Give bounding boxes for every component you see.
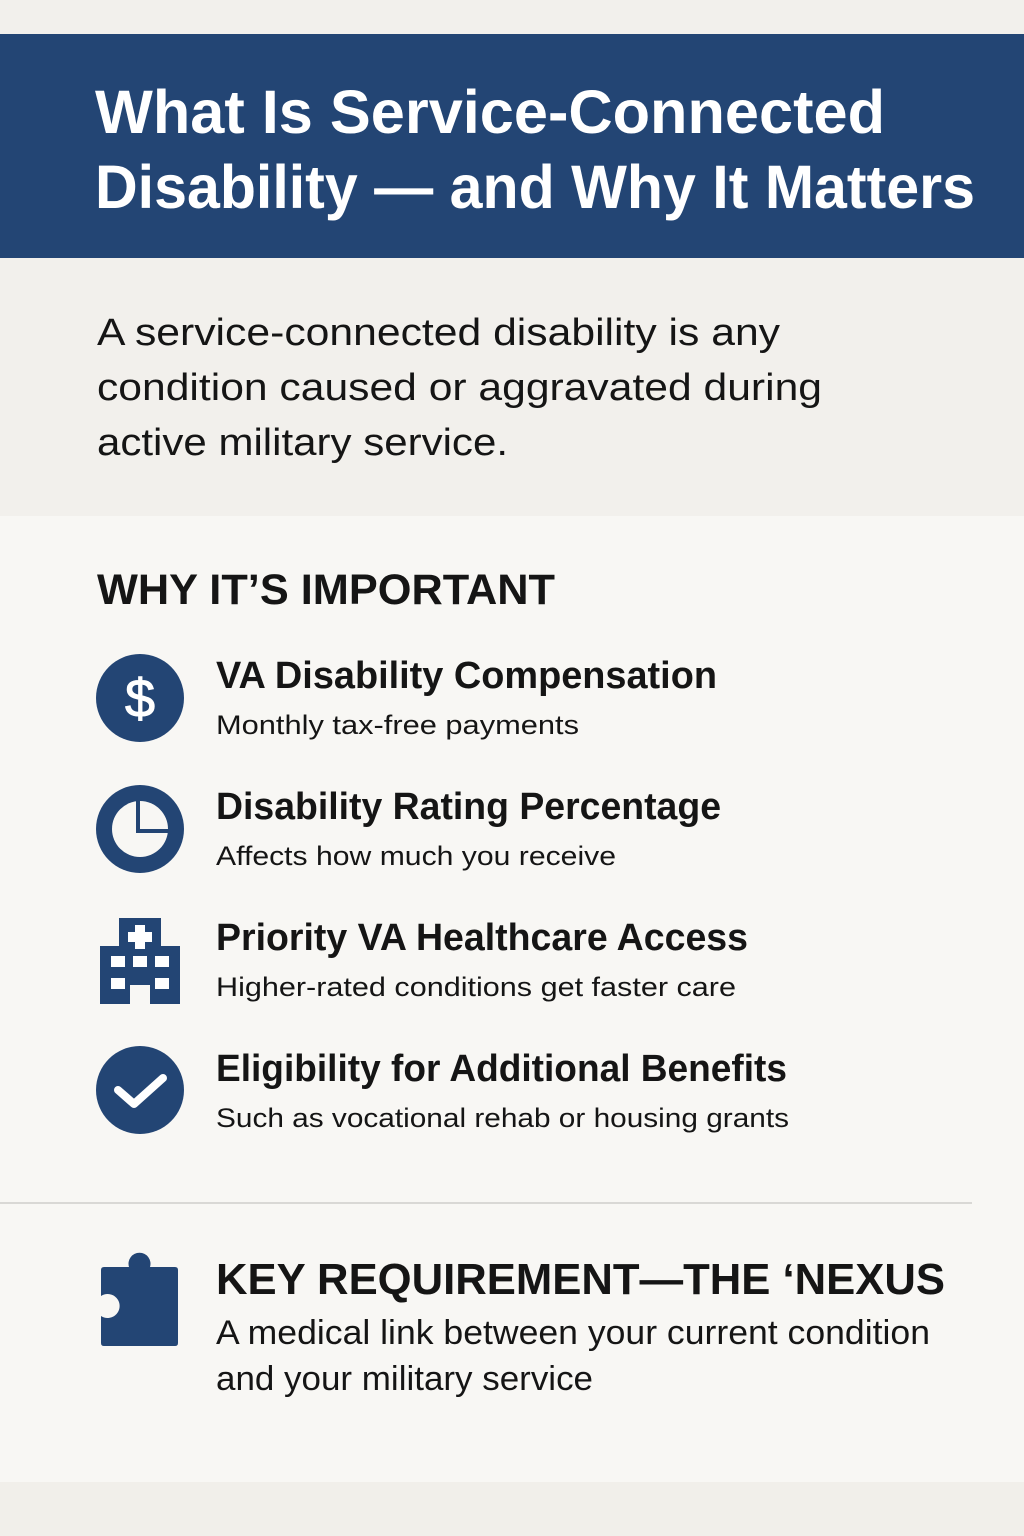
intro text: A service-connected disability is any	[97, 312, 780, 354]
icon: puzzle piece	[101, 1253, 178, 1346]
key requirement section: and your military service	[216, 1360, 593, 1398]
item: VA Disability Compensation	[96, 654, 717, 742]
item: VA Disability Compensation: VA Disability Compensation	[216, 655, 717, 697]
icon: pie chart	[96, 785, 184, 873]
item: Disability Rating Percentage: Disability Rating Percentage	[216, 786, 721, 828]
item: Priority VA Healthcare Access: Higher-rated conditions get faster care	[216, 972, 736, 1002]
title: What Is Service-Connected	[95, 78, 885, 146]
key requirement section: A medical link between your current condition	[216, 1314, 930, 1352]
item: Priority VA Healthcare Access	[100, 917, 748, 1004]
header banner	[0, 34, 1024, 258]
item: Eligibility for Additional Benefits: Eligibility for Additional Benefits	[216, 1048, 787, 1090]
item: Priority VA Healthcare Access: Priority VA Healthcare Access	[216, 917, 748, 959]
icon: dollar	[96, 654, 184, 742]
icon: hospital	[100, 918, 180, 1004]
intro text: condition caused or aggravated during	[97, 367, 822, 409]
item: Eligibility for Additional Benefits: Such as vocational rehab or housing grants	[216, 1103, 789, 1133]
item: Disability Rating Percentage	[96, 785, 721, 873]
key requirement section	[101, 1253, 945, 1398]
key requirement section: KEY REQUIREMENT—THE ‘NEXUS	[216, 1255, 945, 1304]
icon: dollar: $	[125, 669, 155, 729]
title: Disability — and Why It Matters	[95, 153, 975, 221]
title	[95, 78, 975, 221]
item: Eligibility for Additional Benefits	[96, 1046, 789, 1134]
intro text: active military service.	[97, 422, 508, 464]
item: Disability Rating Percentage: Affects how much you receive	[216, 841, 616, 871]
item: VA Disability Compensation: Monthly tax-free payments	[216, 710, 579, 740]
intro text	[97, 312, 822, 464]
icon: checkmark	[96, 1046, 184, 1134]
heading: why it's important: WHY IT’S IMPORTANT	[97, 566, 555, 614]
